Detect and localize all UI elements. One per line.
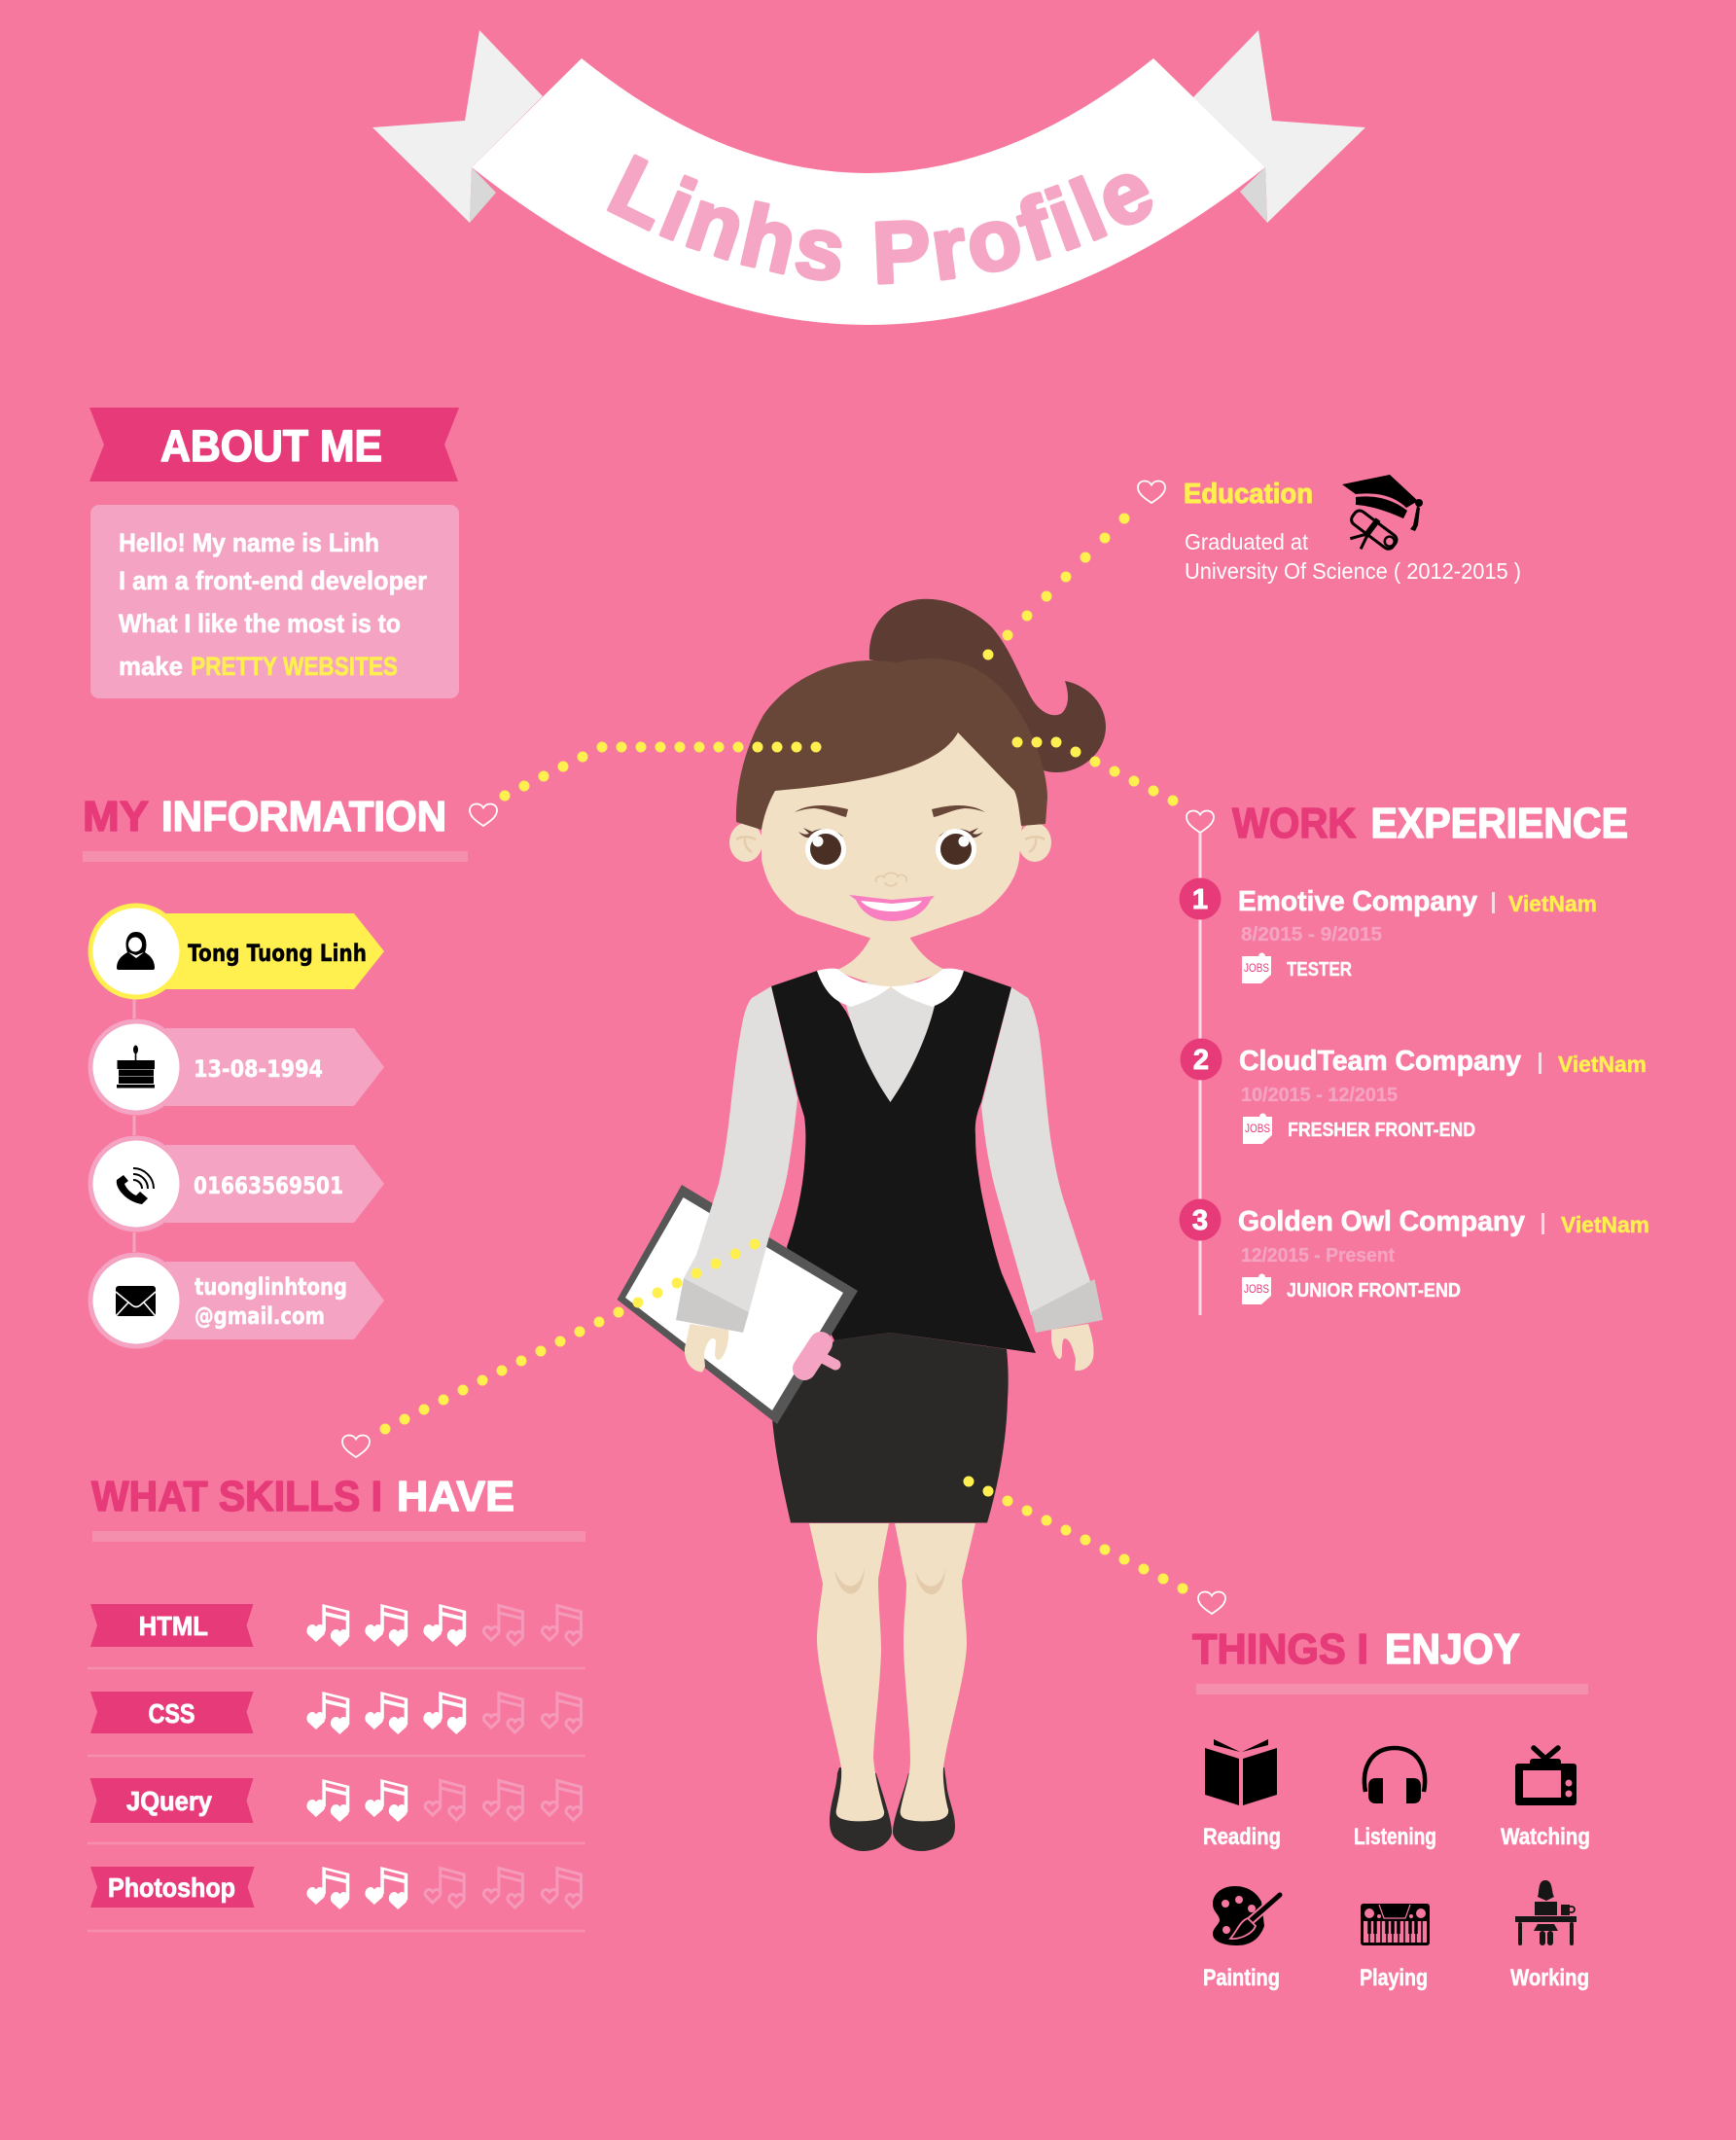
about me text: Hello! My name is Linh bbox=[119, 528, 379, 557]
job 1: VietNam bbox=[1508, 891, 1597, 916]
right hand bbox=[1051, 1324, 1094, 1371]
timeline line bbox=[1198, 833, 1202, 1315]
enjoy labels: Working bbox=[1510, 1965, 1589, 1991]
enjoy labels: Listening bbox=[1354, 1824, 1436, 1850]
right eye bbox=[936, 829, 976, 870]
panel: things I enjoy bbox=[1192, 1591, 1590, 1991]
job 2: 10/2015 - 12/2015 bbox=[1241, 1085, 1398, 1106]
heart marker bbox=[1198, 1591, 1225, 1614]
title text: Linhs Profile bbox=[607, 154, 1153, 285]
icon: book bbox=[1205, 1739, 1277, 1805]
enjoy labels: Reading bbox=[1203, 1824, 1281, 1850]
panel: education: University Of Science ( 2012-2015 ) bbox=[1185, 558, 1521, 584]
teeth bbox=[861, 901, 922, 911]
dotted connector: my information bbox=[505, 747, 816, 796]
panel: work experience bbox=[1179, 800, 1649, 1315]
skill row separators bbox=[88, 1668, 585, 1931]
right cuff bbox=[1031, 1279, 1103, 1333]
skill: HTML: HTML bbox=[139, 1611, 208, 1641]
info row: email bbox=[88, 1253, 384, 1348]
job 2: VietNam bbox=[1558, 1052, 1647, 1077]
icon: person bbox=[117, 932, 155, 970]
info row: email: @gmail.com bbox=[195, 1302, 325, 1330]
job 1 bbox=[1179, 877, 1597, 983]
character illustration bbox=[617, 599, 1106, 1851]
icon: jobs note bbox=[1242, 1274, 1271, 1304]
education heading: Education bbox=[1184, 479, 1313, 510]
title banner bbox=[372, 30, 1365, 325]
right ear bbox=[1018, 823, 1051, 862]
info row: phone bbox=[88, 1136, 384, 1231]
collar bbox=[817, 969, 964, 1007]
skill: CSS: CSS bbox=[148, 1698, 195, 1729]
left cuff bbox=[676, 1278, 749, 1333]
info row: phone: 01663569501 bbox=[194, 1172, 343, 1199]
about me text: I am a front-end developer bbox=[119, 566, 427, 595]
job 3: 12/2015 - Present bbox=[1241, 1245, 1395, 1266]
dotted connector: education bbox=[988, 518, 1124, 655]
front hair bbox=[736, 659, 1047, 830]
my information heading: MY bbox=[83, 793, 149, 840]
banner left fold bbox=[470, 167, 496, 223]
ear details bbox=[736, 837, 1045, 852]
icon: jobs note: JOBS bbox=[1244, 961, 1269, 975]
shoes bbox=[830, 1767, 955, 1851]
icon: jobs note bbox=[1243, 1113, 1272, 1144]
about me ribbon bbox=[89, 408, 459, 482]
job 2: FRESHER FRONT-END bbox=[1288, 1120, 1475, 1141]
back hair bbox=[869, 599, 1106, 772]
about me text bbox=[119, 528, 427, 681]
right sleeve bbox=[981, 987, 1091, 1315]
about me heading: ABOUT ME bbox=[160, 421, 382, 471]
heart marker bbox=[470, 803, 497, 826]
icon: desk worker bbox=[1515, 1880, 1577, 1945]
skills heading: WHAT SKILLS I bbox=[91, 1473, 382, 1520]
about me text: make bbox=[119, 652, 183, 681]
work experience heading bbox=[1232, 800, 1628, 847]
face bbox=[762, 710, 1031, 939]
dotted connector: things I enjoy bbox=[969, 1481, 1183, 1588]
job 3: Golden Owl Company bbox=[1238, 1206, 1525, 1237]
left hand bbox=[685, 1324, 728, 1372]
nose bbox=[876, 873, 906, 886]
job 1: 8/2015 - 9/2015 bbox=[1241, 924, 1382, 945]
heart marker bbox=[1138, 481, 1165, 503]
panel: my information bbox=[83, 793, 497, 1348]
enjoy heading: THINGS I bbox=[1192, 1625, 1368, 1673]
icon: phone bbox=[117, 1168, 154, 1204]
panel: education bbox=[1138, 475, 1521, 584]
enjoy labels: Playing bbox=[1360, 1965, 1428, 1991]
icon: television bbox=[1515, 1748, 1577, 1805]
enjoy labels: Painting bbox=[1203, 1965, 1280, 1991]
neck bbox=[834, 934, 948, 990]
dotted connector: work experience bbox=[1017, 742, 1173, 801]
info row: email: tuonglinhtong bbox=[195, 1273, 347, 1301]
icon: envelope bbox=[116, 1286, 156, 1316]
clipboard clip bbox=[804, 1343, 835, 1369]
icon: graduation cap bbox=[1340, 475, 1423, 563]
skill: JQuery: JQuery bbox=[126, 1786, 212, 1816]
job 2: CloudTeam Company bbox=[1239, 1046, 1521, 1077]
icon: jobs note: JOBS bbox=[1245, 1122, 1270, 1135]
dotted connector: skills bbox=[385, 1244, 755, 1429]
info row: birthday: 13-08-1994 bbox=[194, 1055, 323, 1083]
job 1: TESTER bbox=[1287, 959, 1352, 981]
skill: CSS bbox=[90, 1692, 581, 1734]
job 3: VietNam bbox=[1561, 1212, 1649, 1237]
eyebrows bbox=[795, 805, 985, 817]
about me text: PRETTY WEBSITES bbox=[191, 652, 398, 681]
info row: birthday bbox=[88, 1019, 384, 1115]
shirt front bbox=[842, 982, 939, 1102]
job 2 bbox=[1181, 1039, 1647, 1144]
job 1: Emotive Company bbox=[1238, 886, 1477, 917]
my information heading: INFORMATION bbox=[161, 793, 446, 840]
work experience heading: EXPERIENCE bbox=[1371, 800, 1628, 847]
icon: jobs note bbox=[1242, 953, 1271, 983]
work experience heading: WORK bbox=[1232, 800, 1357, 847]
job 3: 3 bbox=[1192, 1205, 1208, 1236]
icon: jobs note: JOBS bbox=[1244, 1282, 1269, 1296]
education text: Graduated at bbox=[1185, 529, 1309, 554]
eyelashes bbox=[798, 828, 983, 838]
skill: JQuery bbox=[89, 1778, 581, 1823]
left ear bbox=[729, 823, 762, 862]
panel: skills bbox=[88, 1436, 585, 1931]
icon: palette bbox=[1213, 1886, 1280, 1945]
skill: Photoshop: Photoshop bbox=[108, 1872, 235, 1903]
banner ribbon bbox=[472, 58, 1265, 325]
clipboard bbox=[617, 1185, 858, 1424]
icon: cake bbox=[117, 1045, 155, 1088]
heart marker bbox=[1187, 811, 1214, 833]
job 1: 1 bbox=[1192, 884, 1208, 915]
banner right fold bbox=[1240, 167, 1267, 223]
banner left tail bbox=[372, 30, 543, 223]
panel: about me bbox=[89, 408, 459, 698]
job 3: JUNIOR FRONT-END bbox=[1287, 1280, 1461, 1302]
enjoy labels bbox=[1203, 1824, 1590, 1991]
mouth bbox=[849, 895, 935, 921]
job 3 bbox=[1179, 1198, 1649, 1304]
skirt bbox=[772, 1333, 1009, 1523]
job 2: 2 bbox=[1193, 1045, 1209, 1076]
about me box bbox=[90, 505, 459, 698]
icon: headphones bbox=[1364, 1748, 1425, 1803]
enjoy heading bbox=[1192, 1625, 1520, 1673]
enjoy labels: Watching bbox=[1501, 1824, 1590, 1850]
skill: Photoshop bbox=[90, 1867, 581, 1909]
icon: keyboard bbox=[1361, 1904, 1430, 1945]
banner right tail bbox=[1193, 30, 1365, 223]
enjoy heading: ENJOY bbox=[1385, 1625, 1520, 1673]
info row: name: Tong Tuong Linh bbox=[188, 940, 367, 967]
left eye bbox=[805, 829, 846, 870]
connector lines bbox=[132, 999, 136, 1252]
skills heading: HAVE bbox=[397, 1473, 514, 1520]
info row: name bbox=[88, 903, 384, 1000]
about me text: What I like the most is to bbox=[119, 609, 401, 638]
left sleeve bbox=[684, 986, 797, 1312]
skill: HTML bbox=[90, 1604, 581, 1647]
heart marker bbox=[342, 1436, 370, 1457]
legs bbox=[809, 1523, 975, 1821]
vest bbox=[771, 971, 1036, 1353]
knee shadows bbox=[834, 1566, 945, 1594]
